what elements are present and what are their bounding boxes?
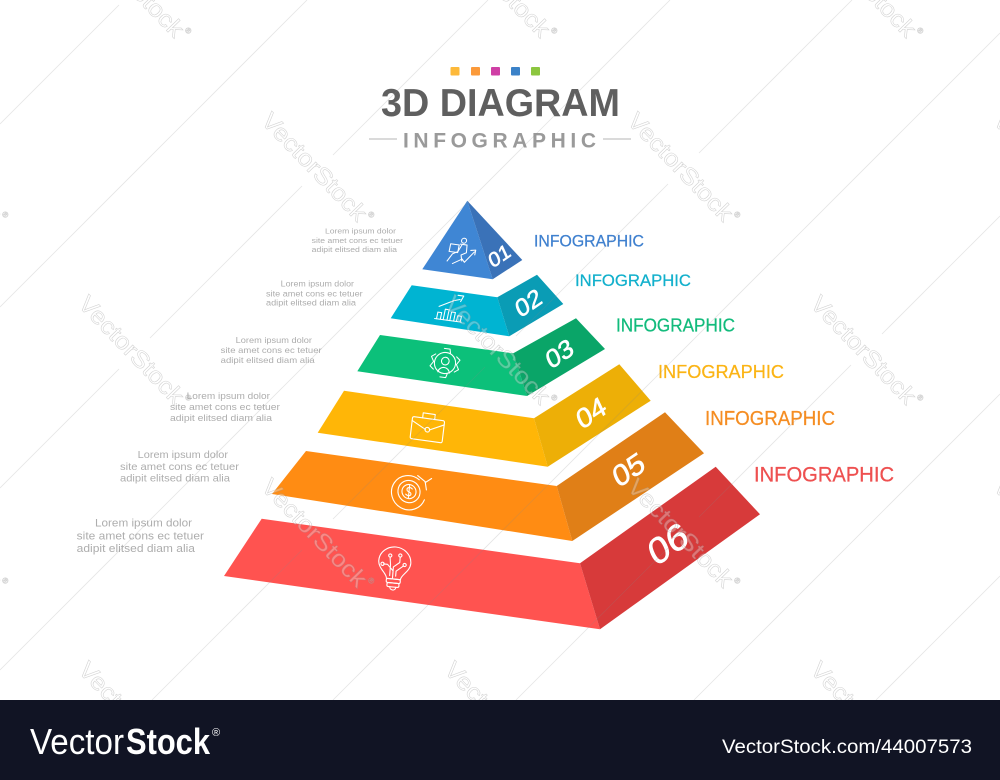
tier 03 bbox=[357, 318, 605, 396]
tier 06 bbox=[224, 467, 760, 629]
pyramid bbox=[224, 201, 760, 629]
description 06: site amet cons ec tetuer bbox=[77, 530, 204, 542]
description 06: adipit elitsed diam alia bbox=[77, 543, 196, 555]
watermarks: ® bbox=[366, 210, 377, 220]
description 05: site amet cons ec tetuer bbox=[120, 462, 240, 473]
description 04: Lorem ipsum dolor bbox=[187, 390, 270, 401]
description 01: Lorem ipsum dolor bbox=[325, 226, 397, 236]
label 03: INFOGRAPHIC bbox=[616, 316, 735, 336]
subheading: INFOGRAPHIC bbox=[403, 130, 596, 152]
watermarks: VectorStock bbox=[622, 107, 739, 226]
icon: running figure with rising arrow bbox=[447, 237, 478, 266]
number 04: 04 bbox=[572, 390, 611, 436]
icon: circuit light bulb bbox=[377, 545, 412, 592]
icon: gear with person bbox=[428, 347, 462, 379]
colour squares bbox=[450, 67, 540, 76]
right side labels bbox=[534, 232, 894, 486]
watermarks: VectorStock bbox=[73, 290, 190, 409]
tier 01 bbox=[422, 201, 522, 279]
description 05: Lorem ipsum dolor bbox=[138, 450, 229, 461]
footer logo: ® bbox=[212, 727, 220, 739]
tier 04 bbox=[318, 364, 651, 467]
watermarks: VectorStock bbox=[256, 107, 373, 226]
heading: 3D DIAGRAM bbox=[381, 82, 620, 125]
watermarks: VectorStock bbox=[805, 290, 922, 409]
footer bar bbox=[0, 700, 1000, 780]
watermarks: ® bbox=[183, 393, 194, 403]
watermarks: VectorStock bbox=[73, 656, 190, 775]
watermarks: ® bbox=[549, 26, 560, 36]
icon: dollar target bbox=[390, 472, 432, 513]
description 06: Lorem ipsum dolor bbox=[95, 518, 192, 530]
left side descriptions bbox=[77, 226, 404, 555]
description 03: site amet cons ec tetuer bbox=[221, 345, 322, 355]
watermarks: VectorStock bbox=[256, 473, 373, 592]
description 02: adipit elitsed diam alia bbox=[266, 299, 357, 308]
watermarks: ® bbox=[549, 393, 560, 403]
watermarks: ® bbox=[0, 576, 11, 586]
icon: bar chart with arrow bbox=[435, 293, 467, 322]
description 02: Lorem ipsum dolor bbox=[281, 280, 354, 289]
title block bbox=[369, 67, 631, 152]
tier icons bbox=[377, 237, 478, 592]
watermarks: VectorStock bbox=[805, 656, 922, 775]
icon: briefcase bbox=[410, 411, 445, 443]
label 01: INFOGRAPHIC bbox=[534, 232, 644, 250]
watermarks: ® bbox=[183, 26, 194, 36]
description 01 bbox=[312, 226, 404, 254]
description 02 bbox=[266, 280, 363, 308]
watermarks: ® bbox=[915, 393, 926, 403]
description 05: adipit elitsed diam alia bbox=[120, 474, 230, 484]
number 01: 01 bbox=[485, 240, 514, 273]
description 03 bbox=[221, 335, 322, 365]
description 06 bbox=[77, 518, 204, 555]
description 01: site amet cons ec tetuer bbox=[312, 236, 404, 245]
watermarks: ® bbox=[732, 576, 743, 586]
tier 05 bbox=[272, 412, 704, 541]
label 05: INFOGRAPHIC bbox=[705, 408, 835, 430]
watermarks: VectorStock bbox=[622, 473, 739, 592]
number 05: 05 bbox=[608, 446, 650, 495]
description 03: adipit elitsed diam alia bbox=[221, 355, 315, 365]
watermarks: ® bbox=[915, 26, 926, 36]
number 06: 06 bbox=[642, 513, 694, 574]
watermarks: VectorStock bbox=[439, 290, 556, 409]
number 02: 02 bbox=[512, 284, 546, 324]
description 01: adipit elitsed diam alia bbox=[312, 245, 398, 254]
description 04: adipit elitsed diam alia bbox=[170, 412, 273, 423]
tier numbers bbox=[485, 240, 694, 574]
number 03: 03 bbox=[542, 334, 578, 375]
description 04: site amet cons ec tetuer bbox=[170, 401, 280, 412]
description 02: site amet cons ec tetuer bbox=[266, 290, 363, 299]
label 06: INFOGRAPHIC bbox=[754, 464, 894, 486]
description 03: Lorem ipsum dolor bbox=[236, 335, 312, 345]
description 04 bbox=[170, 390, 280, 423]
label 02: INFOGRAPHIC bbox=[575, 271, 691, 290]
footer logo: Vector bbox=[30, 721, 124, 762]
watermarks: ® bbox=[366, 576, 377, 586]
footer url: VectorStock.com/44007573 bbox=[722, 736, 972, 758]
watermarks: ® bbox=[732, 210, 743, 220]
footer logo bbox=[30, 721, 220, 762]
watermarks: ® bbox=[0, 210, 11, 220]
watermarks: VectorStock bbox=[439, 656, 556, 775]
description 05 bbox=[120, 450, 240, 484]
tier 02 bbox=[391, 275, 563, 336]
footer logo: Stock bbox=[126, 721, 211, 762]
label 04: INFOGRAPHIC bbox=[658, 361, 784, 382]
